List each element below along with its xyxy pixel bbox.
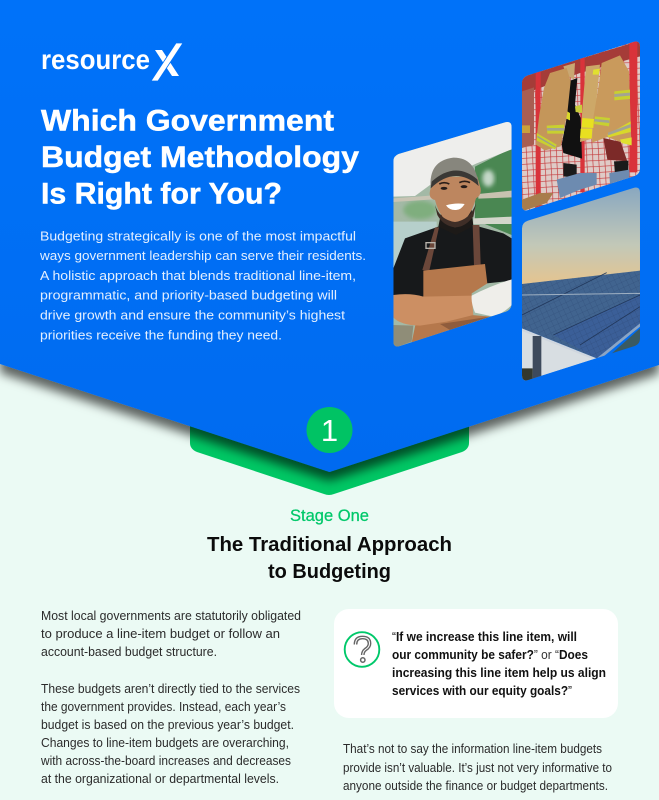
left body text: at the organizational or departmental levels. [41,772,279,786]
right body text: provide isn’t valuable. It’s just not very informative to [343,761,612,775]
green chevron behind number [190,410,469,495]
number badge: 1: 1 [321,413,338,448]
left body text: budget is based on the previous year’s budget. [41,718,294,732]
title: Is Right for You? [41,178,282,210]
callout quote text [392,630,606,698]
intro paragraph: programmatic, and priority-based budgeting will [40,288,337,302]
right body text: That’s not to say the information line-item budgets [343,742,602,756]
section heading: The Traditional Approach [207,534,452,556]
intro paragraph: ways government leadership can serve their residents. [39,248,366,263]
intro paragraph: A holistic approach that blends traditional line-item, [40,268,356,283]
left body text: These budgets aren’t directly tied to the services [41,682,300,696]
section heading [207,534,452,583]
left body text: Changes to line-item budgets are overarching, [41,736,289,750]
title [41,104,359,210]
left body text: account-based budget structure. [41,645,217,659]
left body text: Most local governments are statutorily obligated [41,609,301,623]
callout quote text: increasing this line item help us align [392,666,606,680]
blue header banner [0,0,659,472]
intro paragraph: Budgeting strategically is one of the most impactful [40,228,356,244]
callout card [334,609,618,718]
intro paragraph: priorities receive the funding they need. [40,328,282,342]
left body text: with across-the-board increases and decreases [40,754,291,768]
left body text: to produce a line-item budget or follow an [41,627,280,641]
title: Which Government [41,104,334,138]
number badge: 1 [306,407,352,453]
right body text [343,742,612,793]
intro paragraph [39,228,366,342]
icon: question mark [345,632,379,667]
callout quote text: services with our equity goals?” [392,684,572,698]
left body text [40,609,301,786]
section heading: to Budgeting [268,561,391,583]
stage label: Stage One [290,507,369,525]
intro paragraph: drive growth and ensure the community’s highest [40,308,345,322]
left body text: the government provides. Instead, each year’s [41,700,286,714]
photo: smiling worker in apron [393,120,512,350]
callout quote text: “If we increase this line item, will [392,630,577,644]
photo: solar panels at sunset [522,185,641,382]
photo: firefighter turnout gear [522,40,641,213]
right body text: anyone outside the finance or budget departments. [343,779,608,793]
logo: resourceX: resource [41,44,150,75]
callout quote text: our community be safer?” or “Does [392,648,588,662]
logo: resourceX [41,43,183,81]
title: Budget Methodology [41,141,359,174]
